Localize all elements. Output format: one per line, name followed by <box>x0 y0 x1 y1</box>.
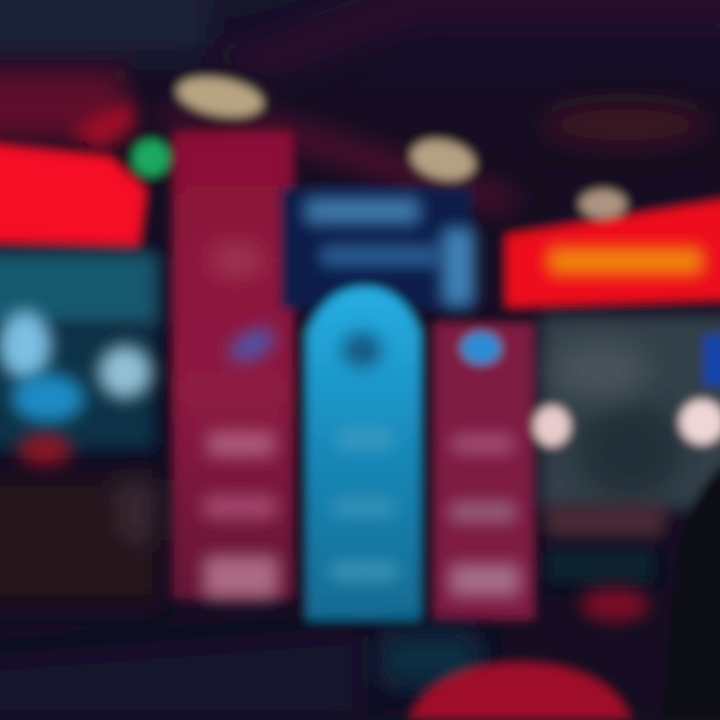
panel: right window <box>534 315 720 537</box>
foreground figure silhouette <box>662 465 720 720</box>
panel: left crimson column <box>174 132 292 598</box>
white light right <box>680 400 720 444</box>
left column row 1 <box>208 432 274 456</box>
panel: left window <box>0 252 160 603</box>
panel: central cyan column <box>307 287 420 620</box>
icon: left column badge <box>225 322 279 368</box>
cyan column row 3 <box>330 562 398 580</box>
panel: right crimson column <box>435 324 533 618</box>
icon: right column badge <box>461 332 501 364</box>
icon: green dot <box>133 140 169 176</box>
right column row 3 <box>450 564 520 596</box>
left column upper patch <box>212 245 262 275</box>
ceiling lamps <box>175 72 626 218</box>
white light left <box>534 406 570 446</box>
panel: blue banner <box>280 187 474 309</box>
left column row 2 <box>204 496 276 518</box>
ceiling and upper wall <box>0 0 720 215</box>
cyan column row 2 <box>332 500 396 516</box>
floor and foreground <box>0 548 655 720</box>
panel: left red sign <box>0 70 145 245</box>
panel: right red sign <box>507 198 720 306</box>
icon: cyan column badge <box>342 332 382 368</box>
right column row 1 <box>452 434 514 454</box>
cyan column row 1 <box>338 430 392 448</box>
right column row 2 <box>450 502 516 522</box>
blue light <box>704 335 720 385</box>
sign lettering glow <box>548 248 703 274</box>
left column row 3 <box>204 556 278 598</box>
